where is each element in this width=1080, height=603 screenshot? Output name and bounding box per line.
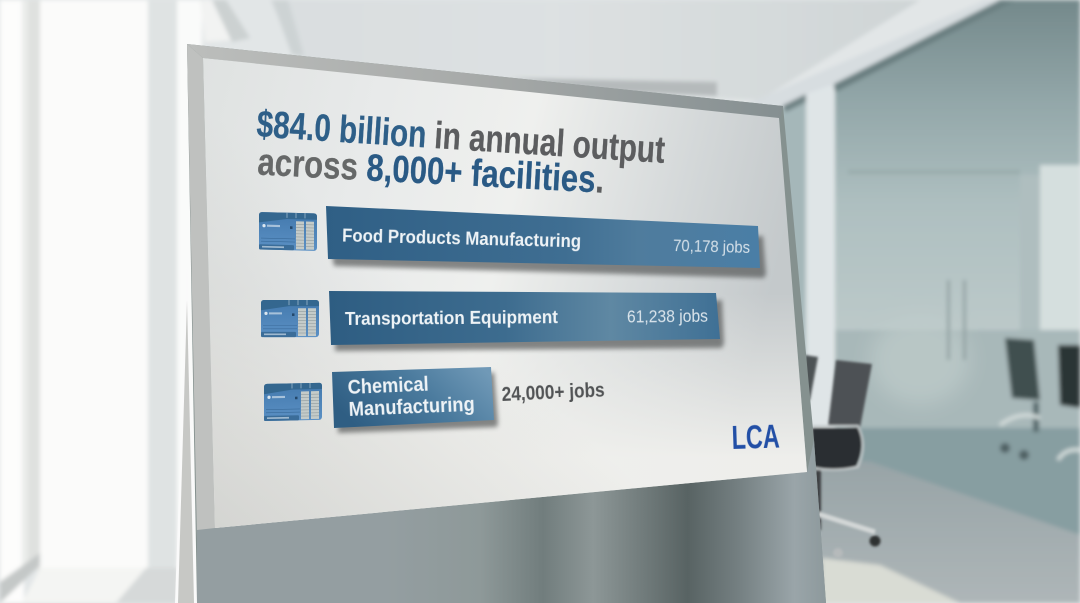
bar label 1: Food Products Manufacturing	[342, 225, 581, 251]
jobs value 3: 24,000+ jobs	[501, 380, 605, 406]
board frame	[187, 44, 826, 603]
stand leg	[175, 262, 197, 603]
row 1: food products manufacturing	[259, 206, 766, 278]
bar shadow 3	[338, 372, 498, 433]
bar 3	[332, 367, 494, 428]
bar label: chemical line: Chemical	[347, 374, 429, 399]
bar shadow 2	[335, 300, 724, 351]
row 3: chemical manufacturing	[264, 367, 605, 433]
ceiling	[190, 0, 920, 100]
metal base	[197, 440, 826, 603]
jobs value 2: 61,238 jobs	[627, 306, 708, 326]
title: $84.0 billion in annual output	[255, 104, 667, 172]
ceiling beam	[272, 0, 304, 56]
upper side frame	[782, 94, 806, 112]
bar label 2: Transportation Equipment	[345, 306, 558, 329]
icon: controller 2	[261, 300, 319, 337]
jobs value 1: 70,178 jobs	[673, 236, 750, 257]
left window	[0, 0, 250, 603]
frame left edge	[187, 44, 215, 540]
floor	[810, 455, 1080, 603]
white column	[806, 84, 834, 470]
side glass pane	[780, 96, 806, 445]
bar 2	[329, 291, 720, 345]
ceiling light band	[510, 78, 717, 96]
background chairs	[1005, 338, 1040, 400]
screen panel	[203, 58, 807, 528]
bar label: manufacturing line: Manufacturing	[348, 394, 475, 421]
bar shadow 1	[332, 236, 766, 278]
icon: controller 3	[264, 383, 322, 421]
title: across 8,000+ facilities.	[257, 142, 605, 202]
frame top edge	[187, 44, 783, 120]
foreground chair	[805, 355, 880, 558]
title	[255, 104, 667, 202]
logo: LCA: LCA	[731, 418, 780, 456]
row 2: transportation equipment	[261, 291, 724, 351]
bar 1	[326, 206, 760, 268]
icon: controller 1	[259, 212, 317, 251]
glass wall	[835, 0, 1080, 535]
display board	[175, 44, 826, 603]
window soffit	[745, 0, 1000, 108]
glass top frame	[832, 0, 1016, 92]
